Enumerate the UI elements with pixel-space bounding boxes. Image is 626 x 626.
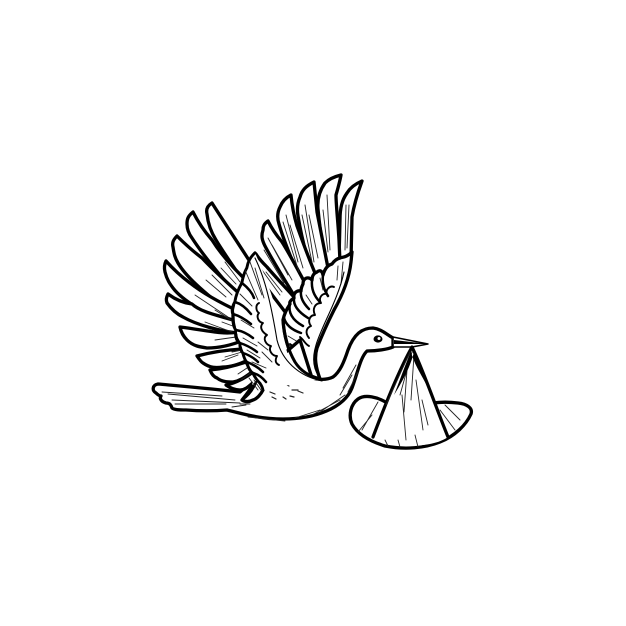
far wing coverts — [283, 252, 352, 379]
near wing feathers — [164, 203, 256, 390]
beak — [393, 337, 428, 347]
far wing primary feathers — [254, 175, 362, 316]
tail, body and neck — [153, 328, 393, 421]
right wing (far wing) — [254, 175, 362, 379]
baby bundle — [350, 347, 471, 448]
near wing coverts and shoulder — [232, 253, 322, 402]
head eye — [374, 335, 382, 343]
